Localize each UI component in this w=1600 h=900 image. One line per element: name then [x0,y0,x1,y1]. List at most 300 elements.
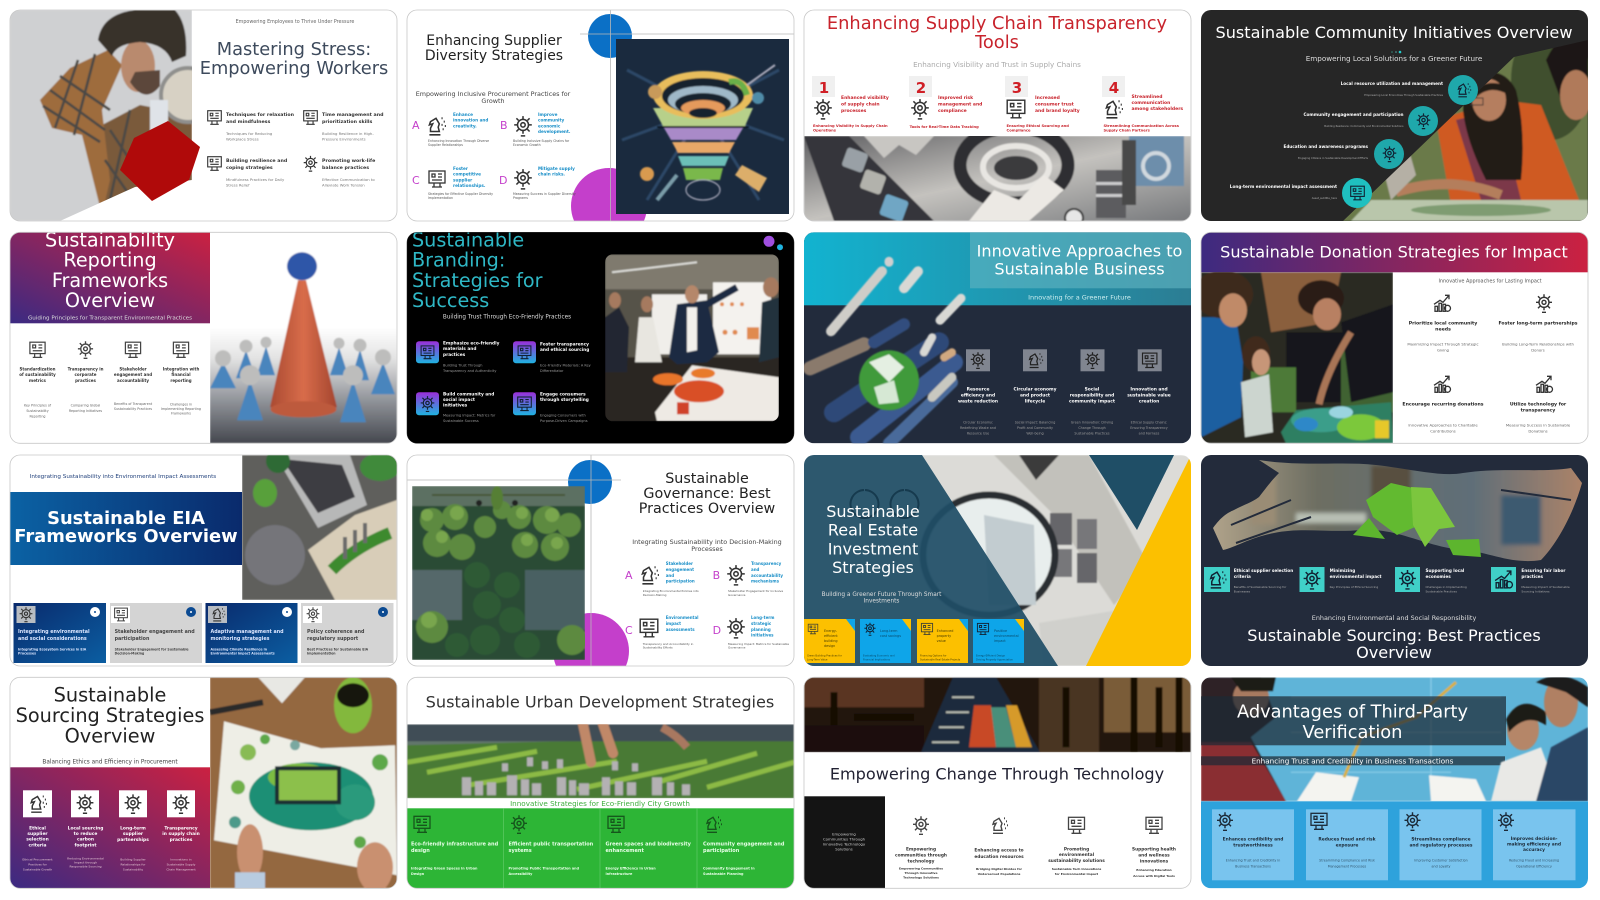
item: community [416,391,496,423]
item: local resource [1341,75,1478,105]
item: community: Community Engagement in [703,866,755,870]
card: cost savings: Financial Implications [863,658,891,662]
item: innovation: creation [1139,398,1159,404]
title: Overview [65,289,155,312]
item: ethical criteria: criteria [29,842,47,848]
card: policy coherence: Best Practices for Sustainable EIA [307,648,368,652]
item: technology: transparency [1521,408,1555,414]
item 4 [1102,76,1183,132]
item: ethical criteria: Ethical [29,826,46,831]
item: work-life balance: Alleviate Work Tension [322,182,365,187]
item: community engagement: Community engagement and participation [1303,112,1404,117]
subtitle: Integrating Sustainability into Environmental Impact Assessments [30,474,216,480]
item: green spaces: Green spaces and biodiversity [606,841,691,847]
item B: Transparency [751,561,781,566]
card: decision-making: making efficiency and [1507,841,1561,847]
item: stakeholder: engagement and [114,372,152,377]
item: integration: financial [171,372,191,377]
title: Reporting [63,249,157,272]
photo: recycling arrows in swoosh [1201,455,1588,565]
subtitle: Growth [481,97,505,105]
title banner: Frameworks Overview [14,526,238,547]
item C: impact [666,621,681,626]
item: stakeholder: Stakeholder [119,366,147,371]
item: green spaces: Infrastructure [606,872,633,876]
item: transparency: Reporting Initiatives [69,409,102,413]
card: environmental and social: Processes [18,652,36,656]
item: community: social impact [443,397,475,403]
subtitle: Empowering Employees to Thrive Under Pressure [236,19,354,25]
item: community engagement [1303,106,1438,136]
item: partnerships: supplier [123,831,144,837]
item: recurring donations [1402,376,1484,434]
item: integration: Implementing Reporting [161,407,201,411]
item: partnerships [1498,294,1578,352]
item: ethical criteria: supplier [27,831,48,837]
item: transparency: Foster transparency [540,342,589,347]
item: supplier selection: criteria [1234,574,1251,579]
item: technology: Donations [1528,429,1548,434]
card: environmental and social: Integrating environmental [18,630,90,635]
item: circular economy [1014,349,1057,435]
photo: team at whiteboards [605,254,779,421]
item: stakeholder [114,342,153,411]
subtitle: Enhancing Visibility and Trust in Supply Chains [913,60,1081,69]
item: local sourcing: to reduce [74,831,97,837]
card: cost savings: Long-term [880,629,897,633]
card: compliance: and regulatory processes [1409,842,1473,848]
item A: Decision-Making [643,593,667,597]
item: local community: needs [1435,327,1451,333]
item: community [703,817,785,876]
item: transparency [513,341,591,373]
item B: and [751,567,760,572]
item: local community [1407,295,1479,352]
item: local resource: Empowering Local Economies Through Sustainable Practices [1364,93,1444,97]
item: resilience: Building resilience and [226,159,287,164]
item: stakeholder: Sustainability Practices [114,407,152,411]
item B: Stakeholder Engagement for Inclusive [728,589,783,593]
item: community: Measuring Impact: Metrics for [443,413,495,417]
item: social responsibility: Sustainable Practices [1074,431,1110,435]
card: cost savings: cost savings [880,634,901,638]
item: public transportation: Efficient public transportation [508,841,593,847]
panel: Sustainable Branding slide [407,228,794,443]
item D: Measuring Success in Supplier Diversity [513,192,576,196]
item: transparency: Differentiator [540,369,564,373]
red hexagon [120,121,200,201]
item: sustainability solutions [1048,817,1105,876]
item: storytelling: Engage consumers [540,392,586,397]
item: local sourcing: Impact through [74,860,97,864]
item: local community: Giving [1437,347,1450,352]
illustration: stripes and globe [810,261,961,443]
item: empowering communities: communities through [895,852,947,858]
item: work-life balance: Effective Communication to [322,177,375,182]
panel: Real Estate Investment slide [804,455,1191,666]
item: resource efficiency: efficiency and [961,392,995,398]
item: sustainability solutions: Sustainable Tech Innovations [1052,867,1101,871]
item: local economies: Supporting local [1426,568,1464,573]
item: health and wellness: innovations [1140,859,1169,865]
item: circular economy: Circular economy [1014,387,1056,392]
item A: engagement [666,567,694,572]
panel: Urban Development slide [407,677,794,888]
item: fair labor: practices [1521,574,1544,579]
item: community: Sustainable Success [443,419,479,423]
card: energy-efficient: efficient [824,634,838,638]
title: Overview [1356,643,1432,662]
item A: creativity. [453,123,477,128]
item: eco-friendly materials: Transparency and Authenticity [442,369,496,373]
item 2: management and [938,102,982,108]
item: sustainability solutions: sustainability solutions [1048,858,1105,864]
item: fair labor: Sourcing Initiatives [1521,590,1550,594]
item: partnerships: partnerships [117,837,149,843]
item: technology: Utilize technology for [1510,402,1566,407]
item: recurring donations: Contributions [1430,429,1456,434]
item: work-life balance [304,156,375,187]
title: Sustainable [665,471,749,487]
card: stakeholder engagement: participation [115,636,150,642]
card: energy-efficient [804,619,855,663]
item: relaxation: Techniques for relaxation [226,113,294,118]
item: empowering communities: Empowering [906,847,936,852]
title: Sustainable [826,502,920,521]
card: adaptive management: Assessing Climate Resilience in [210,648,267,652]
item 4: Streamlined [1132,95,1162,100]
item: circular economy: lifecycle [1025,398,1045,404]
card: policy coherence: regulatory support [307,636,359,642]
item C: Strategies for Effective Supplier Diversity [428,192,493,196]
item B [500,112,571,147]
item: integration: Challenges in [170,402,192,406]
item: green spaces: Energy Efficiency in Urban [606,866,656,870]
item: storytelling: Purpose-Driven Campaigns [540,419,588,423]
item: partnerships: Foster long-term partnerships [1498,320,1578,326]
item 3: and brand loyalty [1035,108,1080,114]
item: health and wellness: Enhancing Education [1136,868,1172,872]
card: property value: value [937,639,946,643]
item 2 [909,76,982,129]
card: adaptive management [206,603,298,663]
title: Governance: Best [643,486,771,502]
title: Sustainable Donation Strategies for Impact [1220,242,1568,261]
item: public transportation: Promoting Public Transportation and [508,866,579,870]
item: green spaces: enhancement [606,848,644,854]
item: infrastructure: Integrating Green Spaces in Urban [411,866,477,870]
item: transparency: Transparency in [68,366,103,371]
item: community engagement: Building Resilience: Community and Environmental Solutions [1324,124,1404,128]
title: Investment [828,539,918,558]
item B: economic [538,123,561,128]
item: health and wellness: and wellness [1138,852,1170,858]
item: sustainability solutions: for Environmental Impact [1055,872,1099,876]
item 1: of supply chain [841,102,880,108]
item: local community: Prioritize local community [1409,321,1477,326]
item 4: Supply Chain Partners [1104,128,1151,132]
item: circular economy: Social Impact: Balancing [1015,420,1055,424]
item: time management: prioritization skills [322,119,373,125]
item 2: 2 [916,79,926,97]
item D: Measuring Impact: Metrics for Sustainable [728,642,789,646]
item A: innovation and [453,118,488,123]
item: eco-friendly materials [416,340,500,373]
item D: planning [751,627,771,632]
item: education access: Underserved Populations [978,872,1021,876]
item A [412,112,489,147]
item: empowering communities: Through Innovative [904,871,938,875]
item: integration: reporting [170,378,192,383]
item: infrastructure [411,816,499,876]
item D: Long-term [751,615,774,620]
item: eco-friendly materials: materials and [443,346,476,352]
title: Branding: [412,249,505,272]
panel: Supply Chain Transparency slide [804,10,1191,227]
item: relaxation: and mindfulness [226,119,271,125]
card: policy coherence: Policy coherence and [307,630,364,635]
card: property value: Financing Options for [920,655,947,658]
item: standardization: Reporting [29,414,46,418]
item 1 [812,76,889,132]
item: transparency: practices [75,378,96,383]
photo: laptop and plants [242,449,400,600]
item: standardization: Key Principles of [24,403,51,407]
item: circular economy: Well-being [1026,431,1044,435]
item: local economies: Challenges in Implementing [1426,585,1467,589]
card: compliance: Streamlines compliance [1411,837,1471,842]
item: resilience: Stress Relief [226,182,250,187]
card: credibility: Enhances credibility and [1223,837,1283,842]
item 3: consumer trust [1035,102,1075,108]
panel: Donation Strategies slide [1193,232,1588,443]
card: environmental impact: impact [994,639,1006,643]
title: Sourcing Strategies [16,704,204,727]
item D: Programs [513,196,528,200]
card: credibility: trustworthiness [1233,842,1273,848]
item: ethical criteria: selection [26,837,49,843]
item: local community: Maximizing Impact Through Strategic [1407,341,1479,346]
item: partnerships: Sustainability [123,867,143,871]
item C: Foster [453,166,468,171]
item: stakeholder: accountability [117,378,149,383]
item: education access [974,818,1024,876]
card: credibility [1212,809,1294,880]
item C: C [625,624,633,637]
blue lower panel [1201,801,1588,888]
card: energy-efficient: building [824,639,838,643]
title: Sustainability [45,228,175,251]
panel: Third-Party Verification slide [1201,676,1588,888]
item B: mechanisms [751,579,780,584]
item D: initiatives [751,633,774,638]
item 3: 3 [1012,79,1022,97]
card: environmental impact: Driving Property Appreciation [976,658,1013,662]
item: community: Sustainable Planning [703,872,744,876]
item: relaxation [208,111,295,141]
title: Empowering Workers [200,58,388,79]
item: time management: Time management and [322,113,384,118]
item: supplier selection: Businesses [1234,590,1250,594]
item: long-term assessment [1230,178,1372,208]
panel: Supplier Diversity slide [407,10,794,244]
title: Sustainable [54,683,166,706]
item D [499,166,576,200]
item A: Stakeholder [666,561,693,566]
title: Enhancing Supplier [426,33,562,49]
photo: city model [407,724,794,798]
item C [412,166,493,200]
subtitle: Processes [691,545,723,553]
item: time management: Building Resilience in High- [322,131,374,136]
title band: Advantages of Third-Party [1237,701,1468,722]
card: decision-making: Improves decision- [1511,837,1557,842]
item: green spaces [606,816,692,876]
title banner [10,492,242,565]
item: partnerships: Long-term [120,826,146,831]
card: decision-making: accuracy [1523,847,1545,853]
item: supplier selection [1204,567,1293,594]
item: local sourcing [67,790,104,869]
subtitle: Innovating for a Greener Future [1028,293,1131,301]
item B [713,561,783,597]
item C: supplier [453,177,473,182]
title: Sustainable Business [994,259,1165,278]
item A: and [666,573,674,578]
card: decision-making [1493,809,1576,880]
item: local sourcing: footprint [74,842,97,848]
item C: C [412,174,420,187]
subtitle: Enhancing Environmental and Social Responsibility [1312,614,1476,622]
item 4: communication [1132,100,1170,106]
card: fraud and risk: Management Processes [1328,864,1367,868]
title band [1201,696,1506,745]
header band [1201,232,1588,272]
item 3: Ensuring Ethical Sourcing and [1006,124,1069,128]
panel: Mastering Stress slide [10,10,397,221]
photo: woman at table [1343,40,1588,221]
photo: business meeting [1201,677,1588,801]
title: Innovative Approaches to [977,241,1182,260]
item: resilience: coping strategies [226,165,273,171]
item: ethical criteria: Sustainable Growth [23,867,52,871]
item: environmental impact [1300,567,1382,592]
item C: competitive [453,172,481,177]
item: innovation: Ensuring Transparency [1130,426,1168,430]
lower gradient panel [10,767,210,888]
card: property value: Enhanced [937,629,953,633]
title: Tools [974,32,1019,53]
panel: Sustainable Governance slide [407,455,794,689]
card: fraud and risk: Streamlining Compliance and Risk [1319,858,1375,862]
item: transparency: and ethical sourcing [540,347,589,353]
title: Sustainable [412,228,524,251]
card: stakeholder engagement: Decision-Making [115,652,145,656]
item C: relationships. [453,183,486,188]
card: environmental impact: Positive [994,629,1007,633]
item B: Improve [538,112,557,117]
decorative dots [764,236,783,250]
item: innovation [1127,349,1171,435]
panel: EIA Frameworks slide [10,449,400,666]
photo: green infographic book [210,677,397,892]
item C [625,615,699,650]
item: infrastructure: design [411,848,430,854]
item: standardization: Standardization [19,366,56,371]
title: Mastering Stress: [217,39,371,60]
item B: B [500,119,508,132]
card: cost savings: Evaluating Economic and [863,655,895,658]
photo: dark room with pyramid chart [804,677,1191,752]
panel: Community Initiatives slide [1201,10,1592,221]
item: innovation: Innovation and [1130,387,1168,392]
card: energy-efficient: Long-Term Value [807,658,828,662]
item: local sourcing: Reducing Environmental [67,856,104,860]
item: empowering communities [895,816,947,879]
item: education access: Enhancing access to [974,848,1024,853]
item: transparency: in supply chain [162,831,200,837]
item: fair labor [1491,567,1570,594]
item D: D [713,624,721,637]
item: education access: education resources [974,854,1024,860]
subtitle: Empowering Inclusive Procurement Practices for [416,90,570,98]
item: transparency: Chain Management [166,867,196,871]
item: transparency: Eco-Friendly Materials: A Key [540,363,591,367]
item 2: Tools for Real-Time Data Tracking [910,125,979,129]
green panel [407,808,794,888]
title: Real Estate [828,521,918,540]
item: sustainability solutions: Promoting [1064,847,1089,852]
item: partnerships: Building Supplier [120,857,146,861]
card: stakeholder engagement: Stakeholder engagement and [115,630,195,635]
title banner: Sustainable EIA [47,508,205,529]
card: policy coherence: Implementation [307,652,336,656]
item: partnerships: Donors [1531,347,1545,352]
item A: participation [666,579,695,584]
black side panel: Communities Through [823,836,866,841]
black side panel: Empowering [832,831,856,836]
item 4: 4 [1109,79,1119,97]
item B: Economic Growth [513,143,541,147]
item: social responsibility [1069,349,1115,435]
item: circular economy: and product [1020,392,1050,398]
item: transparency: Sustainable Supply [167,862,196,866]
item C: assessments [666,627,695,632]
item 4: Streamlining Communication Across [1104,124,1179,128]
item: stakeholder: Benefits of Transparent [114,402,152,406]
item: resource efficiency: waste reduction [958,398,998,404]
item: local sourcing: Responsible Sourcing [69,865,102,869]
subtitle: Balancing Ethics and Efficiency in Procurement [42,759,178,765]
card: policy coherence [301,603,394,663]
panel: Sourcing Strategies slide [10,677,397,892]
card: environmental impact: Energy-Efficient Design [976,655,1005,658]
item: integration: Integration with [163,366,199,371]
title: Enhancing Supply Chain Transparency [827,13,1167,34]
item A: A [412,119,420,132]
item: storytelling: Engaging Consumers with [540,413,586,417]
subtitle: Building a Greener Future Through Smart [822,592,941,598]
subtitle: Innovative Approaches for Lasting Impact [1438,278,1542,284]
photo: metallic icons [804,136,1191,221]
item: community: initiatives [443,403,468,409]
item: health and wellness: Supporting health [1132,847,1176,852]
item: community: participation [703,848,740,854]
item: infrastructure: Eco-friendly infrastructure and [411,841,498,847]
item C: Transparency and Accountability in [643,642,693,646]
funnel illustration [616,39,789,214]
item: relaxation: Techniques for Reducing [226,131,272,136]
